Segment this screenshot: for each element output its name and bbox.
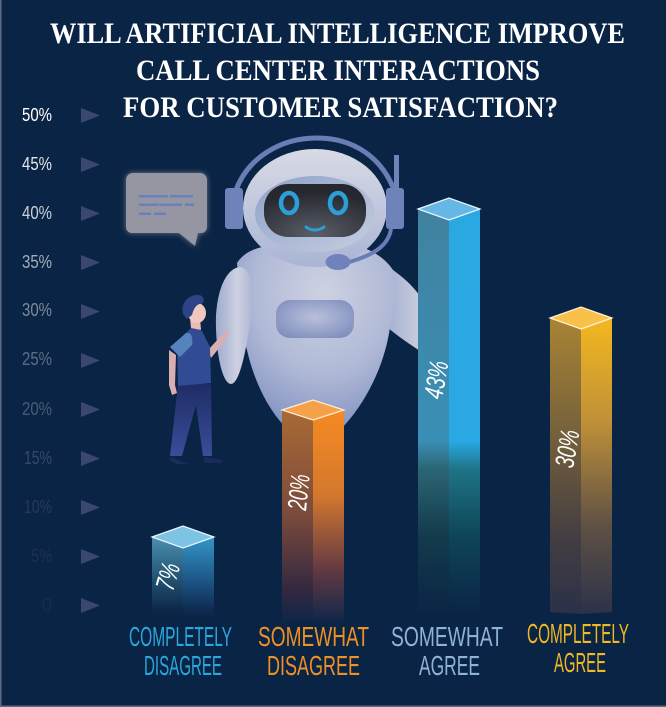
person illustration [169, 295, 229, 464]
label: completely disagree: COMPLETELY [129, 621, 232, 652]
title: FOR CUSTOMER SATISFACTION? [123, 91, 558, 124]
robot illustration [216, 138, 420, 430]
label: somewhat disagree: DISAGREE [267, 650, 360, 681]
robot body [237, 247, 394, 430]
label: somewhat disagree [258, 621, 369, 681]
value label: 30% [549, 427, 586, 470]
label: completely disagree: DISAGREE [144, 650, 222, 681]
robot left arm [216, 267, 251, 384]
person neck and head [190, 318, 201, 330]
robot microphone [326, 229, 391, 270]
value label: 43% [418, 358, 455, 401]
percentage axis: 30% [22, 299, 52, 320]
robot right arm [386, 268, 420, 351]
robot mouth [306, 227, 324, 230]
robot face screen [264, 184, 366, 237]
robot visor [255, 176, 375, 252]
person torso [177, 327, 211, 386]
percentage axis: 0 [42, 594, 52, 615]
value label: 20% [282, 473, 316, 512]
percentage axis: 45% [22, 153, 52, 174]
label: completely agree: AGREE [554, 647, 606, 678]
robot eyes [281, 193, 346, 213]
percentage axis: 15% [24, 447, 52, 468]
label: completely agree [527, 618, 629, 678]
bar: somewhat disagree 20% [282, 400, 344, 622]
percentage axis: 25% [22, 348, 52, 369]
person back arm [169, 350, 177, 395]
bar: completely agree 30% [549, 307, 612, 614]
person forearm [208, 329, 229, 358]
robot ear cups [225, 155, 404, 229]
percentage axis: 40% [22, 202, 52, 223]
label: somewhat agree: SOMEWHAT [391, 621, 503, 652]
bar: somewhat agree 43% [418, 198, 480, 615]
percentage axis: 50% [22, 104, 52, 125]
robot headset band [236, 138, 394, 190]
person legs [170, 384, 212, 456]
percentage axis: 35% [22, 251, 52, 272]
person sleeve [170, 333, 192, 357]
person feet [169, 457, 223, 464]
label: somewhat disagree: SOMEWHAT [258, 621, 369, 652]
person hair [182, 295, 204, 319]
speech bubble icon [126, 173, 207, 246]
percentage axis: 10% [24, 496, 52, 517]
label: somewhat agree: AGREE [419, 650, 480, 681]
robot head [243, 149, 387, 267]
percentage axis [22, 104, 100, 615]
bar: completely disagree 7% [150, 526, 214, 618]
title [50, 17, 625, 124]
percentage axis: 5% [31, 545, 52, 566]
label: somewhat agree [391, 621, 503, 681]
percentage axis: 20% [22, 398, 52, 419]
title: CALL CENTER INTERACTIONS [136, 54, 540, 87]
label: completely disagree [129, 621, 232, 681]
value label: 7% [150, 559, 186, 594]
category labels [129, 618, 629, 681]
robot chest panel [276, 300, 354, 338]
